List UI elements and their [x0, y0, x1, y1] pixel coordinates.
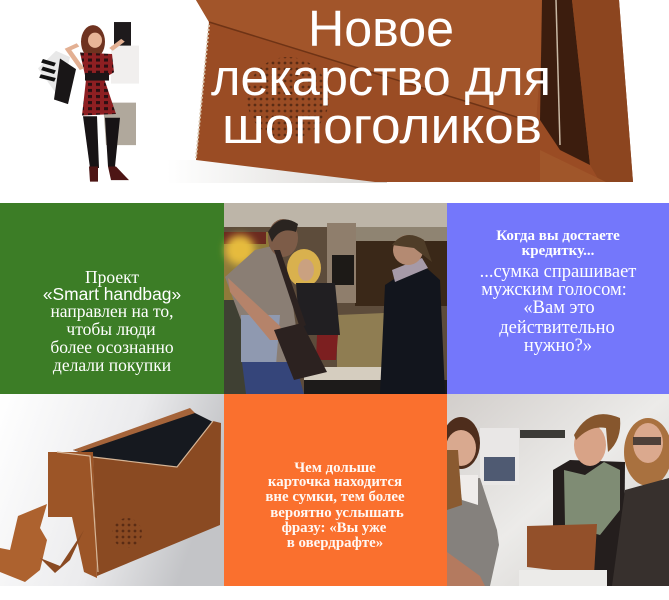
panel: overdraft warning: Чем дольше — [294, 460, 376, 476]
panel: project description — [0, 203, 224, 394]
panel: overdraft warning — [224, 394, 447, 586]
panel: credit card question: действительно — [499, 318, 615, 338]
panel: overdraft warning: в овердрафте» — [287, 535, 383, 551]
photo: people testing the bag in a cafe — [224, 203, 447, 394]
panel: overdraft warning: вероятно услышать — [270, 505, 404, 521]
panel: project description: делали покупки — [53, 355, 171, 375]
title: шопоголиков — [222, 97, 542, 154]
panel: overdraft warning: карточка находится — [268, 474, 402, 490]
panel: credit card question: «Вам это — [523, 298, 595, 318]
woman with shopping bags — [38, 22, 139, 182]
header photo: leather bag — [167, 0, 633, 183]
panel: credit card question: Когда вы достаете — [496, 228, 620, 244]
panel: project description: чтобы люди — [66, 319, 156, 339]
panel: project description: Проект — [85, 267, 139, 287]
title — [211, 0, 551, 154]
panel: credit card question: кредитку... — [522, 243, 595, 259]
panel: credit card question: нужно?» — [524, 336, 592, 356]
panel: project description: направлен на то, — [50, 301, 174, 321]
title: Новое — [308, 0, 454, 57]
photo: three women with the bag — [442, 394, 669, 586]
panel: overdraft warning: фразу: «Вы уже — [282, 520, 387, 536]
photo: open leather handbag — [0, 394, 224, 586]
panel: credit card question: мужским голосом: — [481, 280, 627, 300]
panel: project description: более осознанно — [50, 337, 174, 357]
panel: credit card question — [447, 203, 669, 394]
panel: overdraft warning: вне сумки, тем более — [265, 489, 405, 505]
panel: project description: «Smart handbag» — [43, 284, 181, 304]
panel: credit card question: ...сумка спрашивает — [480, 262, 636, 282]
title: лекарство для — [211, 49, 551, 106]
